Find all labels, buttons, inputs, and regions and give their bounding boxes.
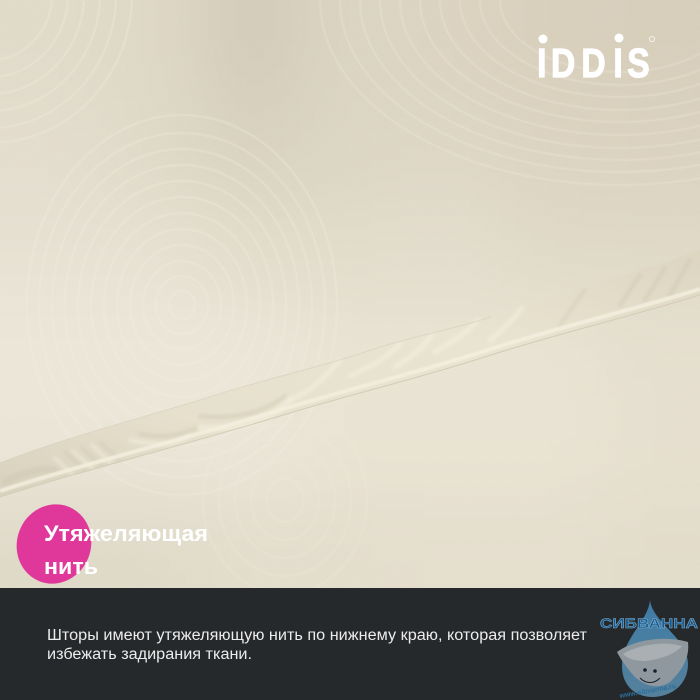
hem highlights [55, 308, 522, 474]
face [643, 668, 647, 672]
hem upper edge [0, 317, 491, 463]
watermark url: www.sibvanna.ru [618, 683, 677, 700]
pink circle accent [16, 504, 92, 584]
swirl pattern: top right [483, 7, 700, 128]
hem lower edge [0, 295, 700, 497]
weighted hem [0, 250, 700, 497]
watermark: Sibvanna mascot [600, 600, 698, 700]
fabric photo background: нить [44, 554, 98, 579]
brand logo: IDDIS [537, 40, 650, 86]
watermark name: СИБВАННА [600, 615, 698, 631]
hem ripples dark [44, 279, 672, 470]
bath tub [617, 639, 688, 686]
caption text: избежать задирания ткани. [47, 646, 252, 663]
water drop [622, 600, 688, 697]
swirl pattern: top left [0, 0, 132, 143]
swirl pattern: lower [203, 406, 367, 594]
caption text [47, 627, 587, 663]
heading: Утяжеляющая [44, 521, 208, 546]
stitching band [0, 289, 700, 491]
swirl pattern: centre [149, 114, 312, 216]
caption text: Шторы имеют утяжеляющую нить по нижнему краю, которая позволяет [47, 627, 587, 644]
dark caption band [0, 588, 700, 700]
